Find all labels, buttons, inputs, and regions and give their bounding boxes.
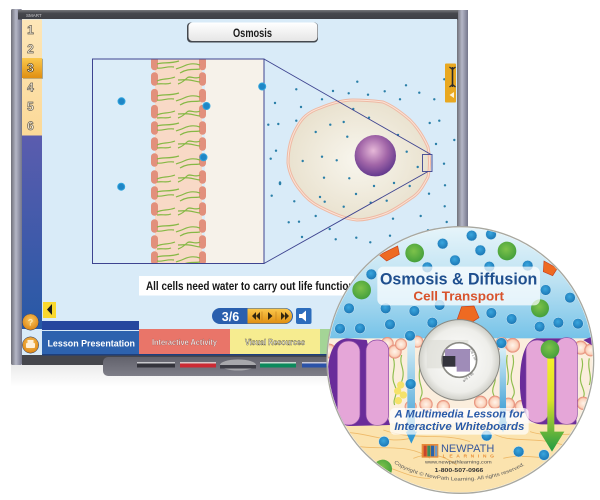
- disc title: [377, 267, 540, 305]
- disc title: Cell Transport: [413, 288, 505, 303]
- CD disc: [326, 226, 594, 494]
- water molecules crossing membrane: [118, 83, 266, 190]
- zoom lines and marker: [264, 59, 432, 264]
- sidebar tabs 1 to 6: 6: [27, 119, 34, 133]
- disc title: Osmosis & Diffusion: [380, 270, 537, 289]
- tab: Visual Resources: Visual Resources: [245, 338, 305, 347]
- disc subtitle: [390, 408, 529, 435]
- NewPath Learning logo: [422, 443, 494, 460]
- whiteboard shadow: [11, 365, 431, 387]
- disc centre hub: 978 1 59: [462, 372, 475, 383]
- sidebar tabs 1 to 6: 1: [27, 23, 34, 37]
- title button: Osmosis: Osmosis: [233, 28, 272, 40]
- green molecules: [352, 242, 559, 478]
- speaker button: [296, 308, 312, 324]
- blue molecules: [335, 229, 583, 460]
- lesson sidebar: [22, 20, 43, 329]
- disc contact details: 1-800-507-0966: [435, 468, 483, 474]
- NewPath Learning logo: NEWPATH: [441, 443, 494, 455]
- left membrane protein: [327, 338, 390, 426]
- disc contact details: [425, 460, 492, 474]
- cell body: [288, 100, 430, 220]
- tab: Interactive Activity: [139, 329, 230, 355]
- help button: [22, 314, 39, 330]
- sidebar tabs 1 to 6: 4: [27, 80, 34, 94]
- tab: Interactive Activity: Interactive Activity: [152, 338, 218, 347]
- lipid tails: [330, 355, 590, 405]
- sidebar tabs 1 to 6: 2: [27, 42, 34, 56]
- right membrane protein: [520, 335, 597, 424]
- title button: Osmosis: [187, 22, 318, 42]
- screen background: [22, 19, 457, 355]
- pagination control 3/6: 3/6: [222, 310, 239, 324]
- orange molecules: [379, 246, 557, 322]
- nucleus: [355, 135, 396, 176]
- diffusion channels: [406, 340, 507, 444]
- disc background bands: [323, 225, 600, 495]
- disc subtitle: Interactive Whiteboards: [394, 421, 524, 433]
- disc centre hub: 978 1 59: [468, 348, 478, 361]
- wrench tool tab: [445, 64, 456, 102]
- active tab 3: [22, 58, 43, 79]
- tab: Visual Resources: [230, 329, 321, 355]
- NewPath Learning logo: LEARNING: [443, 454, 494, 460]
- sidebar tabs 1 to 6: [22, 20, 42, 136]
- disc centre hub: [419, 320, 500, 400]
- disc copyright: Copyright © NewPath Learning. All rights reserved.: [394, 461, 524, 482]
- green transport arrow: [540, 358, 564, 452]
- tab: Lesson Presentation: [42, 331, 139, 355]
- magnified membrane panel: [92, 57, 266, 266]
- pagination control 3/6: [212, 308, 312, 324]
- caption bar: All cells need water to carry out life functions: [146, 279, 360, 293]
- yellow lipid cluster: [394, 381, 407, 404]
- bottom navigation tabs: [42, 321, 350, 356]
- whiteboard frame: [11, 9, 468, 365]
- lipid heads: [322, 336, 597, 413]
- help button: ?: [28, 318, 33, 328]
- disc subtitle: A Multimedia Lesson for: [394, 409, 525, 421]
- active tab 3: 3: [27, 61, 34, 75]
- caption bar: [139, 276, 360, 296]
- water molecules around cell: [267, 78, 455, 244]
- whiteboard frame: SMART: [26, 13, 42, 18]
- pen tray: [103, 357, 343, 376]
- tab: Lesson Presentation: Lesson Presentation: [48, 338, 135, 348]
- yellow back arrow: [43, 302, 56, 318]
- print button: [22, 337, 39, 353]
- disc contact details: www.newpathlearning.com: [425, 460, 492, 465]
- cell diagram: [264, 59, 455, 264]
- lipid bilayer: [151, 57, 206, 266]
- water molecules inside cell: [302, 108, 419, 217]
- sidebar tabs 1 to 6: 5: [27, 100, 34, 114]
